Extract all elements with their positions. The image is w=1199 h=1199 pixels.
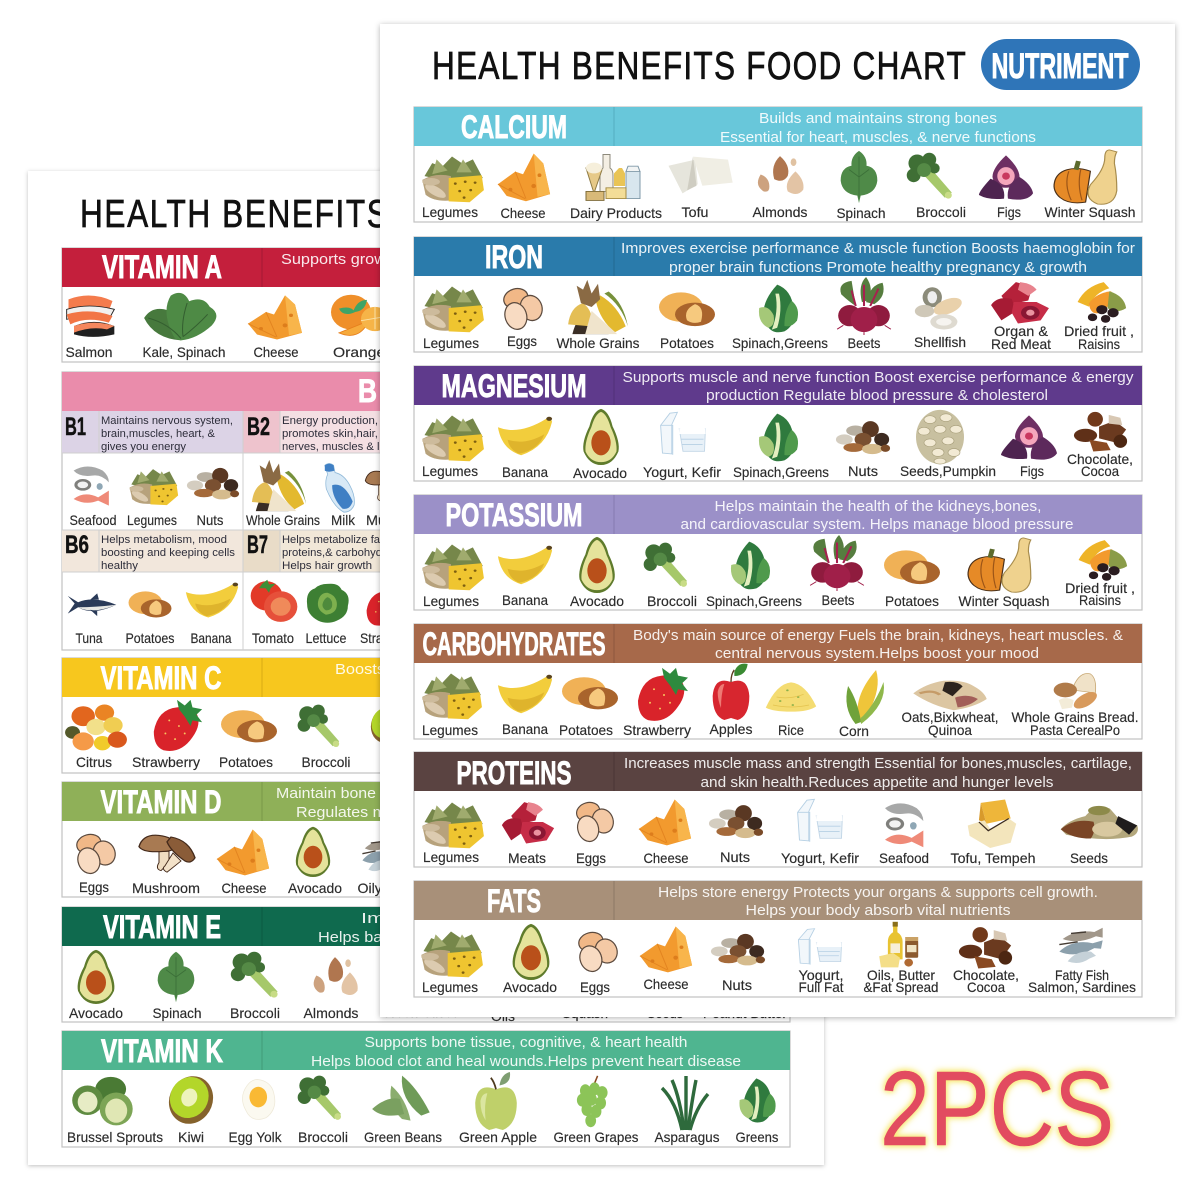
food: Dairy Products: Dairy Products: [570, 205, 662, 221]
food: Nuts: Nuts: [722, 977, 752, 993]
food: Seeds,Pumpkin: Seeds,Pumpkin: [900, 463, 996, 479]
food: Banana: [498, 675, 552, 737]
food: Kiwi: [366, 702, 408, 748]
food: Egg Yolk: [228, 1079, 282, 1145]
food: Avocado: Avocado: [503, 979, 557, 995]
partly hidden label row: Peanut Butter: [703, 1005, 787, 1021]
food: Almonds: [304, 957, 358, 1021]
food: Seafood: [879, 803, 929, 866]
food: Egg Yolk: Egg Yolk: [228, 1129, 282, 1145]
food: Corn: Corn: [839, 723, 869, 739]
panel: Vitamin C: [62, 658, 790, 773]
food: Banana: [186, 583, 238, 646]
food: Fatty Fish, Salmon, Sardines: Fatty Fish: [1055, 967, 1109, 983]
food: Mushrooms: Mushr: [366, 512, 406, 528]
partly hidden label row: Seeds: [647, 1005, 683, 1021]
food: Yogurt, Full Fat: Full Fat: [798, 979, 844, 995]
food: Nuts: Nuts: [720, 849, 750, 865]
panel: Potassium: [414, 495, 1142, 610]
food: Broccoli: Broccoli: [916, 204, 966, 220]
food: Eggs: [574, 800, 617, 866]
panel: Potassium: and cardiovascular system. Helps manage blood pressure: [680, 516, 1074, 533]
food: Oranges: [331, 295, 393, 360]
food: Potatoes: Potatoes: [126, 630, 174, 646]
partly hidden label row: Squash: [562, 1005, 608, 1021]
food: Yogurt, Kefir: [781, 799, 859, 866]
food: Banana: Banana: [190, 630, 232, 646]
food: Potatoes: Potatoes: [660, 335, 714, 351]
food: Cheese: [248, 295, 302, 360]
food: Whole Grains: Whole Grains: [556, 335, 640, 351]
food: Broccoli: [230, 952, 280, 1021]
food: Shellfish: [914, 287, 966, 350]
food: Legumes: [422, 157, 484, 220]
food: Legumes: [422, 545, 484, 609]
food: Nuts: [187, 468, 239, 528]
title: back poster heading: HEALTH BENEFITS: [80, 192, 388, 236]
panel: Iron: Improves exercise performance & muscle function Boosts haemoglobin for: [621, 240, 1135, 257]
B7 block: [247, 531, 382, 572]
B6 block: B6: [65, 531, 89, 559]
food: Milk: [325, 464, 356, 528]
food: Tofu: [668, 157, 733, 220]
panel: Potassium: POTASSIUM: [446, 497, 582, 533]
poster: front sheet (nutrients): [380, 24, 1175, 1017]
food: Banana: Banana: [502, 464, 548, 480]
food: Mushroom: Mushroom: [132, 880, 200, 896]
food: Seafood: [70, 466, 116, 528]
food: Apples: Apples: [710, 721, 752, 737]
food: Legumes: Legumes: [423, 335, 479, 351]
food: Oats, Bixkwheat, Quinoa: [902, 681, 998, 738]
food: Legumes: [422, 287, 484, 351]
food: Spinach: Spinach: [836, 205, 886, 221]
food: Beets: [837, 277, 891, 351]
food: Brussel Sprouts: Brussel Sprouts: [67, 1129, 163, 1145]
food: Kiwi: [162, 1070, 220, 1145]
food: Figs: [1001, 415, 1057, 479]
food: Asparagus: Asparagus: [654, 1129, 720, 1145]
panel: Carbohydrates: Body's main source of energy Fuels the brain, kidneys, heart muscles. &: [633, 627, 1123, 644]
badge: NUTRIMENT: [981, 39, 1140, 90]
food: Nuts: [709, 805, 763, 865]
food: Mushrooms: [365, 471, 406, 528]
food: Legumes: [421, 932, 483, 995]
food: Avocado: Avocado: [288, 880, 342, 896]
panel: Vitamin D: VITAMIN D: [100, 784, 222, 820]
food: Avocado: [570, 537, 624, 609]
panel: Carbohydrates: CARBOHYDRATES: [422, 626, 606, 662]
food: Avocado: [288, 827, 342, 896]
panel: Proteins: PROTEINS: [456, 755, 572, 791]
food: Legumes: Legumes: [422, 979, 478, 995]
partly hidden label row: Green Olives: [381, 1004, 459, 1020]
food: Seeds: Seeds: [1070, 850, 1108, 866]
food: Legumes: [127, 469, 178, 528]
food: Broccoli: [298, 705, 350, 770]
B2 block: Energy production,: [282, 415, 378, 427]
food: Rice: [766, 682, 816, 738]
B7 block: Helps metabolize fa: [282, 534, 381, 546]
food: Whole Grains: Whole Grains: [246, 512, 320, 528]
food: Banana: [498, 546, 552, 608]
food: Seeds: [1061, 806, 1138, 866]
panel: Vitamin K: VITAMIN K: [101, 1033, 223, 1069]
food: Cheese: Cheese: [254, 344, 299, 360]
food: Nuts: Nuts: [848, 463, 878, 479]
panel: Iron: proper brain functions Promote healthy pregnancy & growth: [669, 259, 1087, 276]
food: Dried fruit, Raisins: [1064, 282, 1134, 352]
food: Broccoli: [907, 153, 966, 220]
food: Broccoli: Broccoli: [647, 593, 697, 609]
panel: Fats: Helps store energy Protects your organs & supports cell growth.: [658, 884, 1098, 901]
food: Spinach,Greens: [733, 414, 829, 480]
food: Organ & Red Meat: Red Meat: [991, 336, 1051, 352]
panel: Calcium: CALCIUM: [461, 109, 567, 145]
food: Banana: Banana: [502, 721, 548, 737]
food: Spinach,Greens: [732, 285, 828, 351]
food: Almonds: Almonds: [752, 204, 808, 220]
food: Green Beans: Green Beans: [364, 1129, 442, 1145]
food: Dairy Products: [570, 154, 662, 221]
food: Avocado: Avocado: [69, 1005, 123, 1021]
food: Spinach: [152, 952, 202, 1021]
food: Green Apple: Green Apple: [459, 1129, 537, 1145]
panel: Vitamin K: Supports bone tissue, cognitive, & heart health: [364, 1034, 688, 1051]
food: Tuna: [68, 593, 116, 646]
panel: Vitamin A: Supports grow: [281, 251, 386, 268]
food: Legumes: Legumes: [422, 722, 478, 738]
food: Yogurt, Kefir: [643, 412, 721, 480]
panel: Vitamin E: Helps bal: [318, 929, 386, 946]
food: Broccoli: Broccoli: [302, 754, 350, 770]
food: Strawberry: [360, 585, 420, 646]
food: Broccoli: [298, 1076, 348, 1145]
food: Figs: Figs: [1020, 463, 1044, 479]
poster: back sheet (vitamins): [28, 171, 824, 1165]
food: Almonds: Almonds: [304, 1005, 358, 1021]
food: Dried fruit, Raisins: Raisins: [1078, 336, 1120, 352]
food: Avocado: Avocado: [573, 465, 627, 481]
food: Dried fruit, Raisins: Dried fruit ,: [1065, 580, 1135, 596]
panel: Calcium: Essential for heart, muscles, & nerve functions: [720, 129, 1036, 146]
panel: Calcium: Builds and maintains strong bones: [759, 110, 997, 127]
food: Mushroom: [132, 835, 200, 896]
food: Milk: Milk: [331, 512, 356, 528]
food: Tomato: [251, 580, 297, 646]
B1 block: B1: [65, 413, 86, 441]
food: Avocado: [573, 409, 627, 481]
panel: Potassium: Helps maintain the health of the kidneys,bones,: [714, 498, 1042, 515]
food: Legumes: [422, 803, 484, 865]
panel: Magnesium: Supports muscle and nerve function Boost exercise performance & energy: [622, 369, 1134, 386]
food: Legumes: Legumes: [127, 512, 177, 528]
food: Lettuce: Lettuce: [306, 630, 347, 646]
food: Yogurt, Full Fat: [798, 929, 844, 995]
food: Beets: Beets: [848, 335, 880, 351]
food: Figs: Figs: [997, 204, 1021, 220]
panel: B vitamins: B VITAMINS: [358, 373, 508, 409]
food: Almonds: [752, 156, 808, 220]
food: Greens: [736, 1078, 778, 1145]
panel: Proteins: Increases muscle mass and strength Essential for bones,muscles, cartilage,: [624, 755, 1132, 772]
food: Winter Squash: [958, 538, 1050, 609]
food: Fatty Fish, Salmon, Sardines: [1028, 928, 1136, 995]
B2 block: B2: [247, 413, 270, 441]
food: Chocolate, Cocoa: [953, 927, 1019, 995]
food: Potatoes: [884, 550, 940, 609]
food: Nuts: Nuts: [196, 512, 224, 528]
food: Eggs: Eggs: [507, 333, 537, 349]
food: Green Apple: [459, 1072, 537, 1145]
food: Oils, Butter & Fat Spread: Oils, Butter: [867, 967, 935, 983]
food: Green Grapes: Green Grapes: [554, 1129, 638, 1145]
food: Oranges: Oranges: [333, 344, 393, 360]
partly hidden label row: [381, 1004, 787, 1024]
food: Eggs: Eggs: [580, 979, 610, 995]
food: Legumes: Legumes: [423, 849, 479, 865]
B6 block: healthy: [101, 560, 139, 572]
food: Strawberry: Strawberry: [132, 754, 200, 770]
food: Fatty Fish, Salmon, Sardines: Salmon, Sardines: [1028, 979, 1136, 995]
panel: Carbohydrates: [414, 624, 1142, 739]
food: Organ & Red Meat: Organ &: [994, 323, 1049, 339]
food: Strawberry: Strawberry: [360, 630, 420, 646]
food: Cheese: [498, 154, 550, 221]
title: front poster heading: HEALTH BENEFITS FOOD CHART: [432, 44, 966, 88]
food: Meats: [502, 802, 554, 866]
food: Strawberry: Strawberry: [623, 722, 691, 738]
food: Broccoli: Broccoli: [230, 1005, 280, 1021]
panel: Fats: FATS: [487, 883, 541, 919]
food: Strawberry: [132, 700, 202, 770]
food: Salmon: Salmon: [66, 344, 112, 360]
panel: Proteins: and skin health.Reduces appetite and hunger levels: [700, 774, 1054, 791]
food: Chocolate, Cocoa: Chocolate,: [953, 967, 1019, 983]
B7 block: Helps hair growth: [282, 560, 372, 572]
callout: 2PCS: 2PCS: [880, 1050, 1114, 1168]
food: Nuts: [711, 934, 765, 993]
food: Whole Grains: [556, 280, 640, 351]
panel: Magnesium: production Regulate blood pressure & cholesterol: [706, 387, 1048, 404]
panel: Carbohydrates: central nervous system.Helps boost your mood: [715, 645, 1039, 662]
panel: Vitamin D: [62, 782, 790, 897]
food: Eggs: [576, 930, 621, 995]
food: Shellfish: Shellfish: [914, 334, 966, 350]
food: Spinach: [836, 151, 886, 221]
food: Oats, Bixkwheat, Quinoa: Quinoa: [928, 722, 972, 738]
food: Avocado: [69, 950, 123, 1021]
food: Potatoes: [219, 710, 277, 770]
food: Oils, Butter & Fat Spread: &Fat Spread: [864, 979, 938, 995]
food: Winter Squash: Winter Squash: [958, 593, 1050, 609]
panel: Iron: IRON: [485, 239, 543, 275]
food: Corn: [839, 670, 884, 739]
food: Tomato: Tomato: [252, 630, 294, 646]
food: Cheese: Cheese: [644, 850, 689, 866]
food: Cheese: [217, 829, 269, 896]
panel: Vitamin E: [62, 907, 790, 1024]
B6 block: [65, 531, 236, 572]
food: Whole Grains Bread, Pasta Cereal: Whole Grains Bread.: [1012, 709, 1138, 725]
food: Oily Fish: [358, 838, 412, 896]
food: Eggs: [501, 286, 546, 349]
food: Chocolate, Cocoa: [1067, 412, 1133, 479]
panel: Vitamin E: Im: [361, 910, 385, 927]
food: Kiwi: Kiwi: [178, 1129, 204, 1145]
food: Banana: [498, 417, 552, 480]
partly hidden label row: Oils: [491, 1008, 515, 1024]
panel: Fats: Helps your body absorb vital nutrients: [746, 902, 1010, 919]
panel: Fats: [414, 881, 1142, 997]
food: Spinach,Greens: [706, 542, 802, 609]
food: Oily Fish: Oily Fish: [358, 880, 412, 896]
food: Eggs: Eggs: [79, 879, 109, 895]
food: Spinach: Spinach: [152, 1005, 202, 1021]
food: Chocolate, Cocoa: Cocoa: [1081, 463, 1119, 479]
food: Tofu: Tofu: [682, 204, 708, 220]
food: Oils, Butter & Fat Spread: [864, 922, 938, 995]
food: Oats, Bixkwheat, Quinoa: Oats,Bixkwheat,: [902, 709, 998, 725]
food: Yogurt, Full Fat: Yogurt,: [798, 967, 844, 983]
food: Seeds,Pumpkin: [900, 410, 996, 479]
food: Dried fruit, Raisins: Dried fruit ,: [1064, 323, 1134, 339]
food: Winter Squash: [1044, 150, 1136, 220]
food: Cheese: Cheese: [222, 880, 267, 896]
food: Citrus: Citrus: [76, 754, 112, 770]
food: Tuna: Tuna: [76, 630, 103, 646]
food: Eggs: Eggs: [576, 850, 606, 866]
panel: Proteins: [414, 752, 1142, 867]
food: Yogurt, Kefir: Yogurt, Kefir: [781, 850, 859, 866]
food: Legumes: Legumes: [422, 463, 478, 479]
panel: Vitamin K: Helps blood clot and heal wounds.Helps prevent heart disease: [311, 1053, 741, 1070]
food: Dried fruit, Raisins: [1065, 540, 1135, 608]
food: Nuts: [836, 421, 890, 479]
food: Asparagus: [654, 1076, 720, 1145]
food: Legumes: Legumes: [422, 204, 478, 220]
food: Seafood: Seafood: [879, 850, 929, 866]
food: Meats: Meats: [508, 850, 546, 866]
food: Brussel Sprouts: [67, 1077, 163, 1145]
food: Kale, Spinach: Kale, Spinach: [142, 344, 226, 360]
food: Greens: Greens: [736, 1129, 778, 1145]
food: Legumes: [422, 674, 482, 738]
food: Strawberry: [623, 668, 691, 738]
B2 block: promotes skin,hair,: [282, 428, 378, 440]
panel: Vitamin A: VITAMIN A: [102, 249, 222, 285]
panel: Vitamin D: Regulates m: [296, 804, 386, 821]
B1 block: brain,muscles, heart, &: [101, 428, 216, 440]
food: Cheese: Cheese: [644, 976, 689, 992]
food: Tofu, Tempeh: Tofu, Tempeh: [950, 850, 1036, 866]
panel: Vitamin K: [62, 1031, 790, 1147]
food: Citrus: [65, 704, 127, 770]
food: Potatoes: [559, 677, 618, 738]
food: Whole Grains Bread, Pasta Cereal: [1012, 673, 1138, 738]
food: Potatoes: [126, 591, 174, 646]
food: Organ & Red Meat: [991, 282, 1051, 352]
food: Yogurt, Kefir: Yogurt, Kefir: [643, 464, 721, 480]
panel: Iron: [414, 237, 1142, 352]
B1 block: [65, 413, 233, 453]
food: Eggs: [74, 832, 119, 895]
food: Beets: Beets: [822, 592, 854, 608]
B6 block: boosting and keeping cells: [101, 547, 236, 559]
food: Spinach,Greens: Spinach,Greens: [732, 335, 828, 351]
food: Whole Grains: [246, 460, 320, 528]
food: Potatoes: Potatoes: [885, 593, 939, 609]
panel: Magnesium: MAGNESIUM: [442, 368, 586, 404]
B7 block: proteins,& carbohyd: [282, 547, 382, 559]
food: Lettuce: [306, 584, 349, 646]
food: Chocolate, Cocoa: Chocolate,: [1067, 451, 1133, 467]
B2 block: [247, 413, 382, 453]
B6 block: Helps metabolism, mood: [101, 534, 227, 546]
food: Dried fruit, Raisins: Raisins: [1079, 592, 1121, 608]
panel: Magnesium: [414, 366, 1142, 481]
food: Spinach,Greens: Spinach,Greens: [706, 593, 802, 609]
food: Green Beans: [364, 1076, 442, 1145]
food: Apples: [710, 664, 752, 737]
panel: Vitamin C: Boosts: [335, 661, 385, 678]
food: Beets: [810, 535, 864, 608]
B1 block: gives you energy: [101, 441, 186, 453]
B7 block: B7: [247, 531, 268, 559]
food: Kale, Spinach: [142, 293, 226, 360]
food: Banana: Banana: [502, 592, 548, 608]
B2 block: nerves, muscles & li: [282, 441, 382, 453]
food: Potatoes: Potatoes: [219, 754, 273, 770]
panel: Vitamin C: VITAMIN C: [100, 660, 222, 696]
panel: B vitamins: [62, 372, 790, 650]
panel: Calcium: [414, 107, 1142, 222]
food: Whole Grains Bread, Pasta Cereal: Pasta CerealPo: [1030, 722, 1120, 738]
food: Potatoes: Potatoes: [559, 722, 613, 738]
food: Avocado: [503, 924, 557, 995]
food: Seafood: Seafood: [70, 512, 116, 528]
food: Salmon: [66, 296, 114, 360]
panel: Vitamin E: VITAMIN E: [103, 909, 221, 945]
food: Cheese: [639, 799, 691, 866]
food: Rice: Rice: [778, 722, 804, 738]
food: Green Grapes: [554, 1076, 638, 1145]
food: Potatoes: [659, 292, 715, 351]
badge: NUTRIMENT: NUTRIMENT: [992, 47, 1128, 86]
food: Legumes: [422, 416, 484, 479]
food: Broccoli: Broccoli: [298, 1129, 348, 1145]
food: Avocado: Avocado: [570, 593, 624, 609]
panel: Vitamin D: Maintain bone: [276, 785, 376, 802]
food: Chocolate, Cocoa: Cocoa: [967, 979, 1005, 995]
panel: Vitamin A: [62, 248, 790, 362]
B1 block: Maintains nervous system,: [101, 415, 233, 427]
food: Broccoli: [644, 543, 697, 609]
food: Spinach,Greens: Spinach,Greens: [733, 464, 829, 480]
food: Tofu, Tempeh: [950, 799, 1036, 866]
food: Winter Squash: Winter Squash: [1044, 204, 1136, 220]
food: Cheese: Cheese: [500, 205, 546, 221]
food: Legumes: Legumes: [423, 593, 479, 609]
food: Cheese: [640, 926, 692, 992]
food: Figs: [979, 155, 1033, 220]
